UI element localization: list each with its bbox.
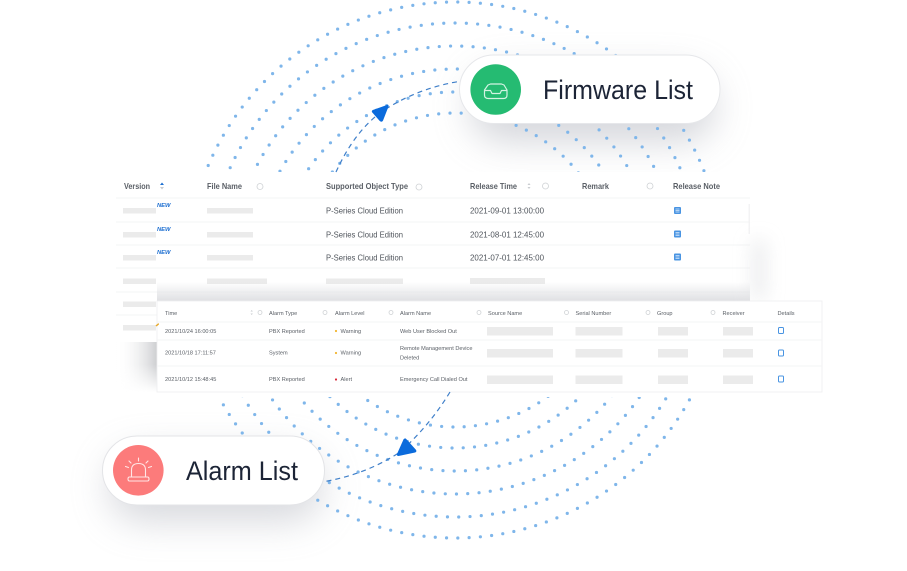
firmware row 3: NEW — [157, 250, 171, 256]
firmware row 3: P-Series Cloud Edition — [326, 252, 403, 262]
alarm row 2: Deleted — [400, 356, 419, 362]
icon: green inbox tray — [470, 64, 521, 115]
panel: alarm table — [156, 301, 822, 392]
arrow: table to alarm pill — [325, 392, 450, 482]
alarm row 1: Web User Blocked Out — [400, 329, 457, 335]
alarm table header — [165, 310, 795, 317]
alarm table header: Source Name — [488, 311, 522, 317]
alarm table header: Alarm Level — [335, 311, 365, 317]
alarm row 3: 2021/10/12 15:48:45 — [165, 377, 216, 383]
alarm row 2: System — [269, 350, 288, 356]
alarm table header: Time — [165, 311, 177, 317]
panel: firmware table — [116, 172, 750, 342]
firmware row 3: 2021-07-01 12:45:00 — [470, 252, 544, 262]
alarm table header: Receiver — [722, 311, 745, 317]
firmware table header: Remark — [582, 182, 609, 191]
alarm row 2 — [165, 346, 784, 362]
firmware row 1: NEW — [157, 203, 171, 209]
dotted concentric rings — [187, 2, 723, 538]
alarm table header: Details — [778, 311, 795, 317]
alarm row 1: Warning — [340, 329, 361, 335]
label: Alarm List: Alarm List — [186, 456, 298, 486]
firmware row 1: P-Series Cloud Edition — [326, 206, 403, 216]
shadow: alarm table over firmware table — [116, 240, 766, 392]
shadow: alarm pill — [108, 452, 323, 522]
firmware row 1 — [123, 203, 681, 216]
shadow: firmware pill — [470, 72, 715, 142]
icon: red alarm siren — [113, 445, 164, 496]
alarm table header: Alarm Name — [400, 311, 431, 317]
firmware row 4 placeholders — [123, 278, 545, 284]
firmware row 1: 2021-09-01 13:00:00 — [470, 206, 544, 216]
label: Firmware List: Firmware List — [543, 75, 693, 105]
pill: Firmware List — [460, 55, 720, 124]
alarm table header: Serial Number — [576, 311, 611, 317]
alarm table header: Group — [657, 311, 673, 317]
firmware table header: Release Time — [470, 182, 517, 191]
alarm row 3: Alert — [340, 377, 352, 383]
firmware table header: Release Note — [673, 182, 720, 191]
alarm row 2: 2021/10/18 17:11:57 — [165, 350, 216, 356]
alarm row 3: PBX Reported — [269, 377, 305, 383]
alarm row 2: Warning — [340, 350, 361, 356]
pill: Alarm List — [102, 436, 324, 505]
firmware row 2 — [123, 227, 681, 240]
firmware table header: Supported Object Type — [326, 182, 408, 191]
firmware row 2: P-Series Cloud Edition — [326, 230, 403, 240]
firmware row 2: 2021-08-01 12:45:00 — [470, 230, 544, 240]
firmware row 2: NEW — [157, 227, 171, 233]
alarm row 3: Emergency Call Dialed Out — [400, 377, 468, 383]
alarm row 3 — [165, 376, 784, 384]
alarm row 2: Remote Management Device — [400, 346, 472, 352]
firmware table header: Version — [124, 182, 150, 191]
alarm row 1 — [165, 327, 784, 336]
firmware table header — [124, 182, 720, 191]
alarm table header: Alarm Type — [269, 311, 297, 317]
alarm row 1: 2021/10/24 16:00:05 — [165, 329, 216, 335]
alarm row 1: PBX Reported — [269, 329, 305, 335]
firmware rows 5 and 6 placeholders — [123, 302, 156, 330]
arrow: table to firmware pill — [336, 81, 462, 172]
firmware table header: File Name — [207, 182, 242, 191]
firmware row 3 — [123, 250, 681, 262]
